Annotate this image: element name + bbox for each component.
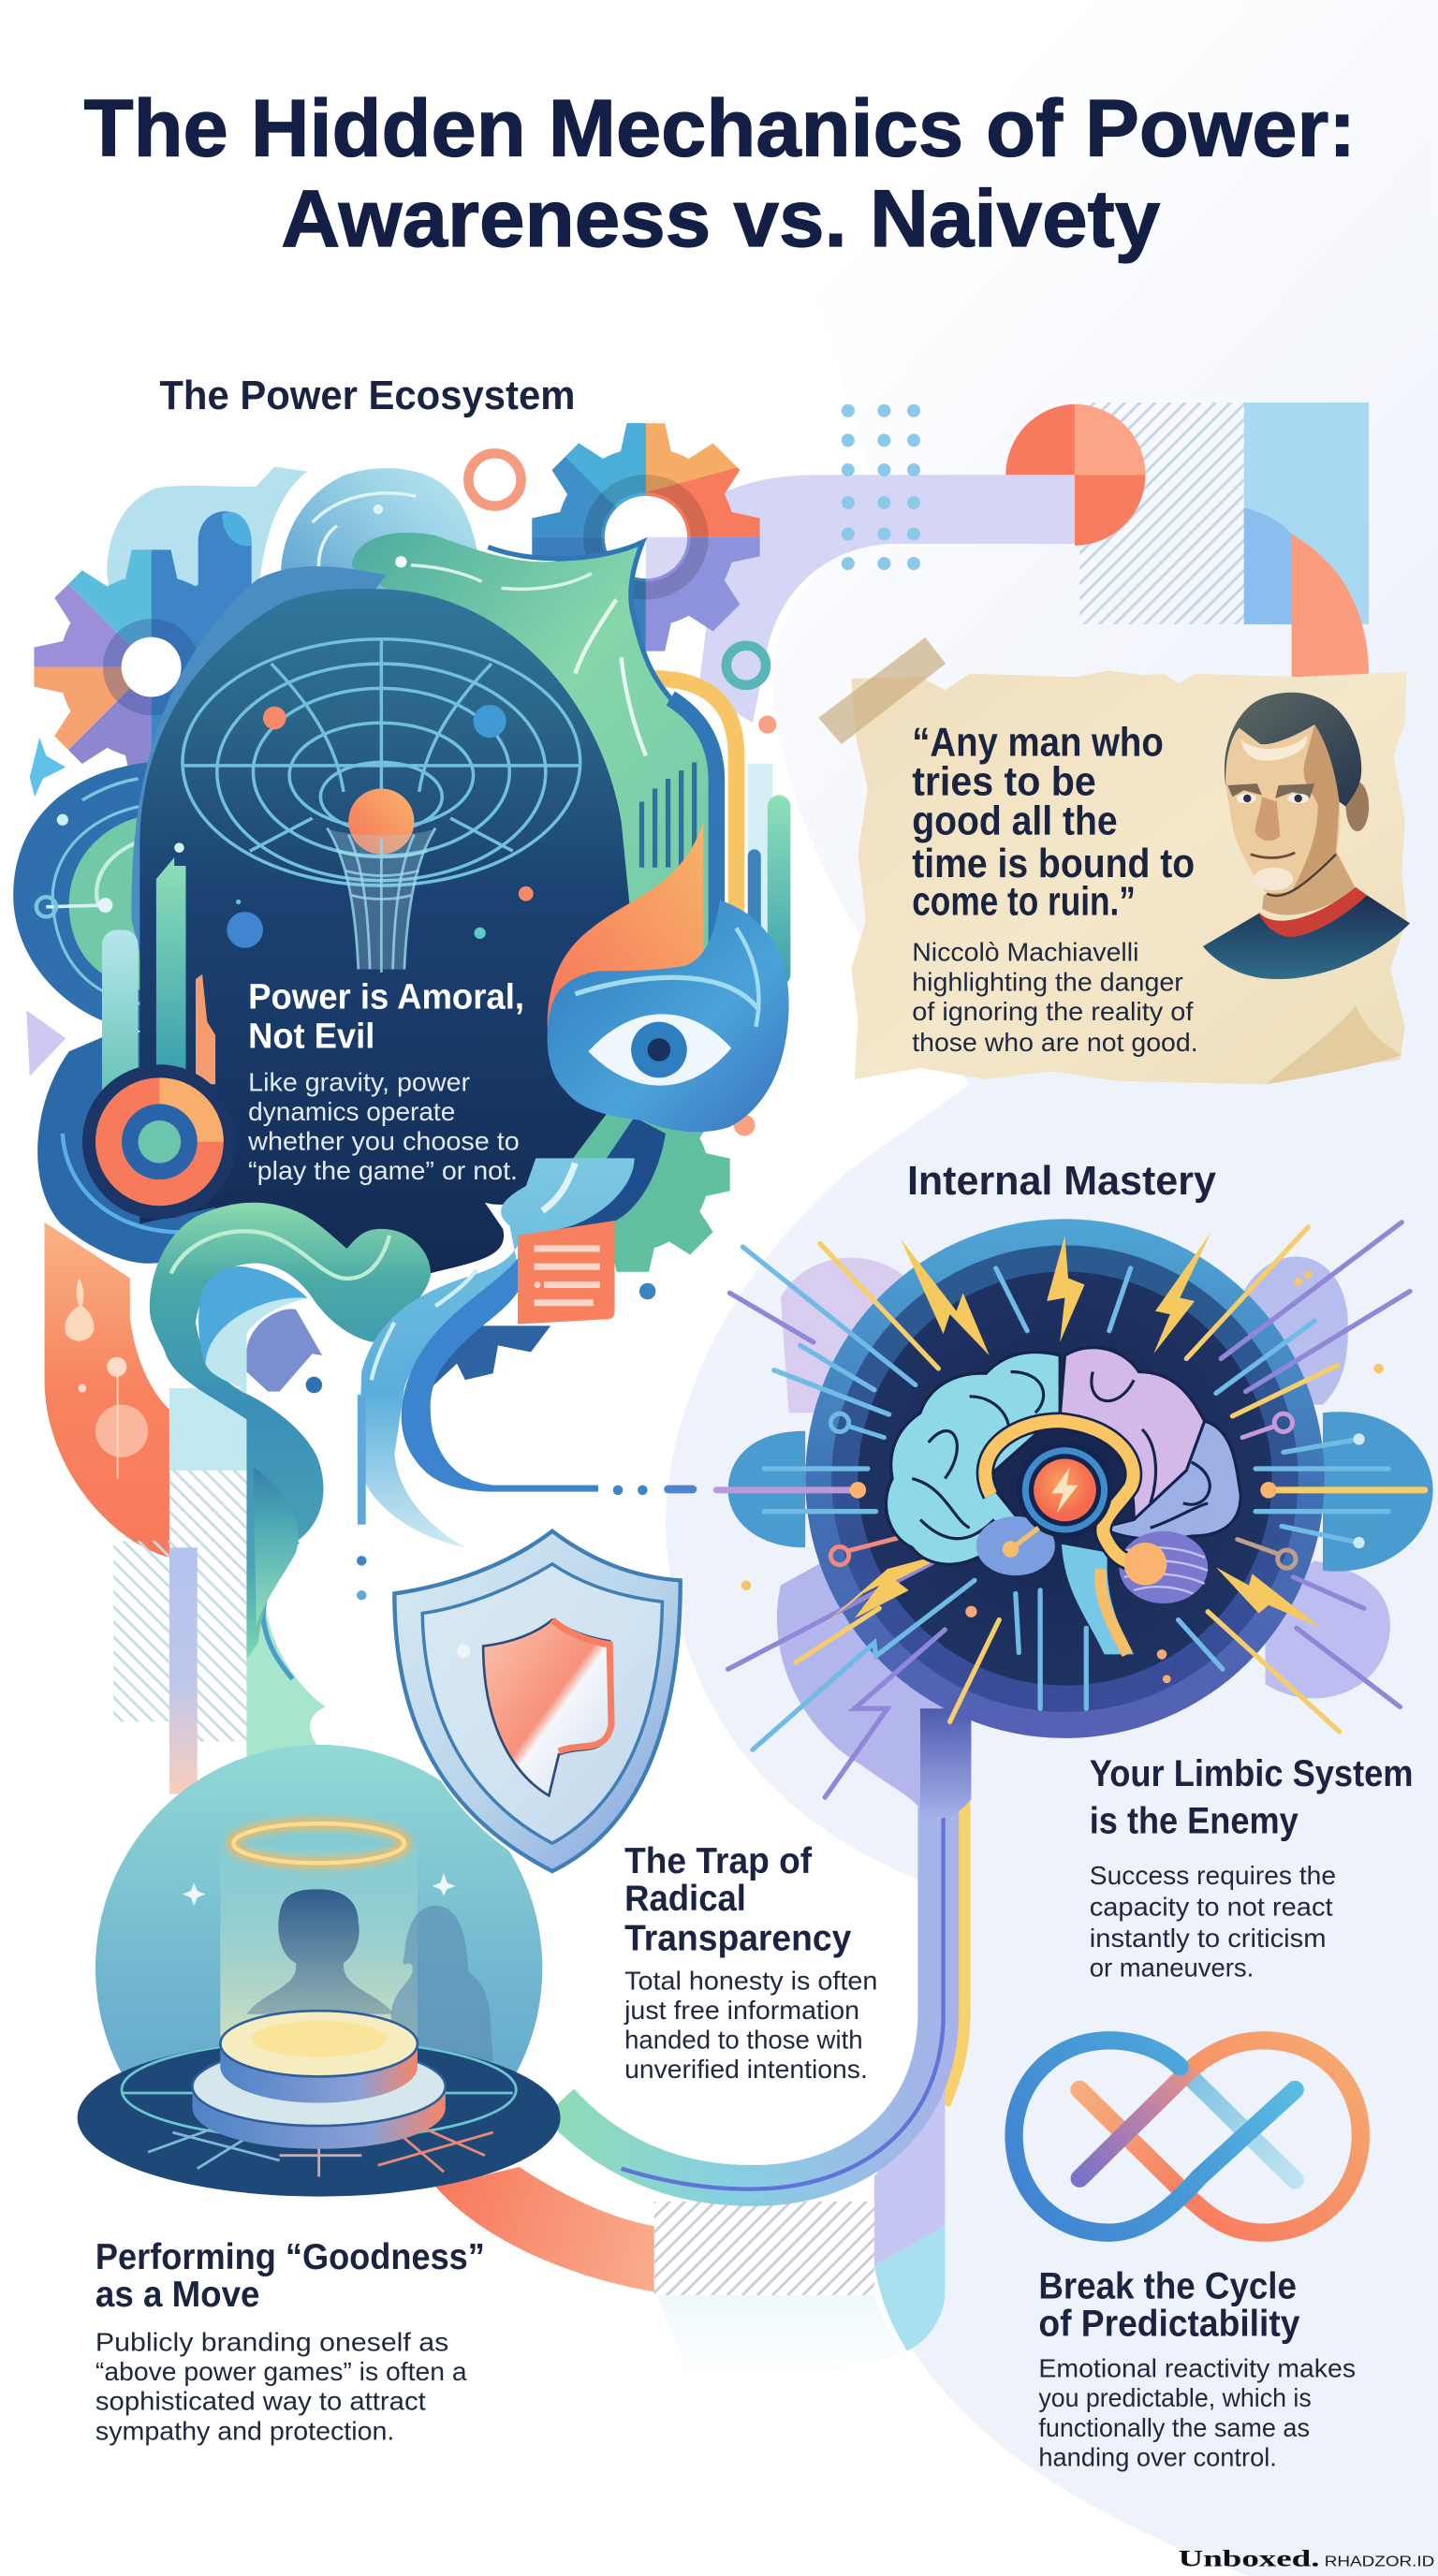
quote text: time is bound to (912, 841, 1195, 886)
text: trap of radical transparency: Radical (624, 1879, 746, 1919)
orange descending stroke (1079, 2089, 1192, 2200)
gear left (34, 549, 198, 766)
lower left salmon shape (45, 1222, 169, 1558)
sky block (874, 2226, 945, 2351)
quote text (912, 719, 1195, 925)
text: trap of radical transparency: The Trap of (624, 1841, 812, 1881)
ribbon pale piece (206, 1297, 307, 1390)
disc ring (831, 1245, 1299, 1712)
deco rings and dots (26, 453, 776, 1136)
lavender block (874, 2062, 945, 2265)
text: performing goodness: Publicly branding oneself as (95, 2328, 448, 2357)
text: performing goodness: sophisticated way to attract (95, 2387, 426, 2416)
pale descending stroke (1186, 2073, 1295, 2180)
vertical column (169, 1547, 198, 1794)
orange loop (1079, 2041, 1360, 2232)
icon: purple gear fragment (246, 1309, 322, 1392)
text: limbic system: is the Enemy (1090, 1801, 1299, 1842)
quote attribution: Niccolò Machiavelli (912, 938, 1138, 967)
cerebellum (1119, 1531, 1208, 1603)
panel text: power is amoral: Power is Amoral, (248, 977, 524, 1017)
head navy (139, 589, 644, 1273)
lower left blob (37, 1032, 246, 1264)
chin light (1254, 868, 1293, 890)
text: break the cycle: handing over control. (1038, 2442, 1277, 2471)
panel text: power is amoral: Not Evil (248, 1017, 374, 1056)
title: Awareness vs. Naivety (281, 174, 1160, 264)
icon: infinity cycle (1014, 2041, 1360, 2232)
swoosh top mid blue (281, 468, 480, 633)
text: trap of radical transparency: just free information (624, 1996, 859, 2025)
amygdala core (1003, 1442, 1112, 1558)
halo (232, 1823, 406, 1863)
salmon arc (1292, 534, 1369, 677)
green column (246, 1577, 326, 1771)
face (1225, 724, 1340, 894)
sky swirl ribbon (359, 1158, 635, 1547)
text: break the cycle (1038, 2265, 1356, 2471)
panel: head with gravity well (131, 566, 644, 1273)
brain lower left lobe (976, 1516, 1055, 1575)
pupil (648, 1038, 670, 1061)
quote attribution (912, 938, 1198, 1057)
text: break the cycle: you predictable, which is (1038, 2383, 1312, 2412)
hatched panels left (113, 1445, 246, 1741)
ray end dots (741, 1271, 1384, 1683)
text: trap of radical transparency: Transparency (624, 1918, 852, 1958)
silhouette main figure (246, 1889, 394, 2014)
brow shadows (1227, 783, 1314, 798)
text: limbic system: Your Limbic System (1090, 1753, 1414, 1794)
blue wave edge (263, 1541, 298, 1679)
sparkles (183, 1873, 455, 1906)
quote text: come to ruin.” (912, 879, 1136, 925)
hatched rectangle bottom (654, 2202, 874, 2295)
hair (1225, 693, 1361, 807)
text: trap of radical transparency (624, 1841, 877, 2084)
ribbon highlight (171, 1231, 389, 1279)
chart bars on left of head (102, 842, 215, 1110)
text: performing goodness: as a Move (95, 2275, 259, 2315)
text: performing goodness: Performing “Goodness” (95, 2237, 485, 2277)
parchment curl (1266, 1005, 1401, 1084)
blue quarter (1244, 507, 1292, 624)
blue loop (1014, 2041, 1295, 2232)
icon: green gear lower right (554, 1114, 730, 1272)
gear right (532, 423, 760, 651)
forehead highlight (1240, 736, 1307, 761)
main connecting track (435, 1643, 960, 2382)
side bars (748, 764, 790, 986)
text: performing goodness (95, 2237, 485, 2445)
limbic arc (985, 1421, 1145, 1564)
purple blobs behind (777, 1256, 1390, 1823)
dot grid (842, 404, 920, 570)
robe (1203, 896, 1410, 979)
panel: machiavelli quote parchment (818, 637, 1410, 1084)
ear (1346, 782, 1369, 831)
watermark (1179, 2544, 1434, 2571)
text: limbic system: instantly to criticism (1090, 1924, 1327, 1953)
title: The Hidden Mechanics of Power: (84, 84, 1356, 174)
iris (631, 1022, 687, 1077)
quote attribution: highlighting the danger (912, 967, 1183, 996)
panel text: power is amoral: “play the game” or not. (248, 1156, 518, 1185)
green ribbon (150, 1203, 431, 1660)
blue ribbon (402, 1257, 598, 1492)
red semicircle quadrants (1005, 404, 1075, 475)
side blue blobs (728, 1412, 1433, 1572)
disc outer (805, 1219, 1325, 1738)
brain left lobe (887, 1353, 1060, 1564)
funnel (327, 828, 435, 973)
neck (1262, 851, 1356, 915)
portrait of machiavelli (1203, 693, 1410, 979)
brain folds (912, 1372, 1210, 1539)
brain illustration (716, 1219, 1433, 1823)
blue tower (198, 511, 252, 657)
text: break the cycle: functionally the same as (1038, 2413, 1310, 2442)
thin blue inner line (622, 1808, 944, 2189)
panel text: power is amoral (247, 977, 524, 1185)
panel text: power is amoral: Like gravity, power (248, 1067, 470, 1096)
platform ellipse (78, 2039, 561, 2197)
lower disc (192, 2047, 446, 2149)
tape (818, 637, 946, 744)
heading: internal mastery: Internal Mastery (907, 1158, 1217, 1204)
icon: dark blue gear fragment (431, 1325, 550, 1388)
yellow band (940, 1643, 960, 2103)
light beam (220, 1848, 418, 2070)
rays (716, 1222, 1425, 1797)
watermark: Unboxed. (1179, 2544, 1319, 2571)
pale fade (657, 2295, 907, 2382)
red collar (1259, 887, 1367, 937)
platform grid (122, 2041, 516, 2177)
under eye dark band (559, 1117, 666, 1229)
pale highlight (542, 1164, 575, 1211)
text: break the cycle: Break the Cycle (1038, 2265, 1297, 2306)
quote text: “Any man who (912, 719, 1164, 765)
text: performing goodness: “above power games” is often a (95, 2357, 467, 2386)
pale swoosh (107, 466, 307, 624)
eye white (588, 1014, 731, 1086)
flame (548, 822, 703, 1027)
decorative geometry top right (698, 402, 1369, 723)
central sphere (348, 788, 414, 855)
icon: orange donut (82, 1064, 237, 1219)
jaw line (1267, 855, 1336, 896)
band (559, 1808, 938, 2186)
brain stem (1062, 1544, 1134, 1654)
panel text: power is amoral: dynamics operate (248, 1097, 455, 1126)
watermark: RHADZOR.ID (1325, 2554, 1434, 2569)
gravity grid (183, 639, 580, 886)
leaf dot line (395, 556, 407, 567)
parchment sheet (851, 670, 1407, 1084)
hatched rectangle (1079, 402, 1244, 624)
head outer crescent (131, 566, 387, 986)
lightning bolts (822, 1232, 1321, 1628)
text: limbic system: or maneuvers. (1090, 1953, 1254, 1982)
mouth (1251, 853, 1295, 857)
ribbon inner leaf (253, 1467, 299, 1627)
text: trap of radical transparency: Total honesty is often (624, 1966, 877, 1995)
eyes (1237, 794, 1309, 803)
leaf green shape (352, 533, 723, 986)
quote text: good all the (912, 798, 1118, 844)
orange note (518, 1221, 615, 1325)
lollipop nodes (830, 1413, 1296, 1568)
icon: glass shield (391, 1526, 683, 1876)
nose (1255, 797, 1280, 841)
upper disc (220, 2011, 418, 2103)
dome with pedestal (78, 1745, 561, 2197)
title (84, 84, 1356, 264)
background light wave (666, 0, 1438, 2576)
stem (920, 1708, 971, 1821)
cheek shadow (1292, 724, 1340, 892)
limbic node (1124, 1543, 1167, 1586)
text: performing goodness: sympathy and protection. (95, 2416, 394, 2445)
text: limbic system: capacity to not react (1090, 1892, 1333, 1921)
left blue blob (13, 762, 156, 1032)
heading: the power ecosystem: The Power Ecosystem (159, 373, 575, 418)
leaf bars (639, 762, 697, 868)
brain back lobe (1101, 1421, 1240, 1540)
connector dots to brain (306, 1283, 697, 1600)
sky rectangle (1244, 402, 1369, 624)
panel text: power is amoral: whether you choose to (247, 1127, 520, 1156)
disc inner (858, 1271, 1272, 1686)
text: trap of radical transparency: unverified intentions. (624, 2055, 868, 2084)
quote attribution: of ignoring the reality of (912, 997, 1194, 1026)
salmon sweep (435, 2167, 654, 2291)
text: limbic system (1090, 1753, 1414, 1982)
eye blob (548, 900, 789, 1132)
orbiting bodies (227, 705, 534, 948)
quote text: tries to be (912, 758, 1096, 804)
dome sphere (95, 1745, 542, 2191)
purple rising stroke (1079, 2073, 1186, 2178)
yellow strip (654, 679, 736, 920)
pale column (169, 1388, 246, 1471)
text: break the cycle: of Predictability (1038, 2304, 1299, 2345)
lavender band (698, 475, 1077, 723)
brain right lobe (1060, 1348, 1205, 1519)
silhouette second figure (391, 1906, 493, 2062)
quote attribution: those who are not good. (912, 1028, 1198, 1057)
ribbon blue blob (198, 1266, 307, 1367)
text: trap of radical transparency: handed to those with (624, 2026, 863, 2055)
text: break the cycle: Emotional reactivity makes (1038, 2354, 1356, 2383)
text: limbic system: Success requires the (1090, 1861, 1336, 1890)
